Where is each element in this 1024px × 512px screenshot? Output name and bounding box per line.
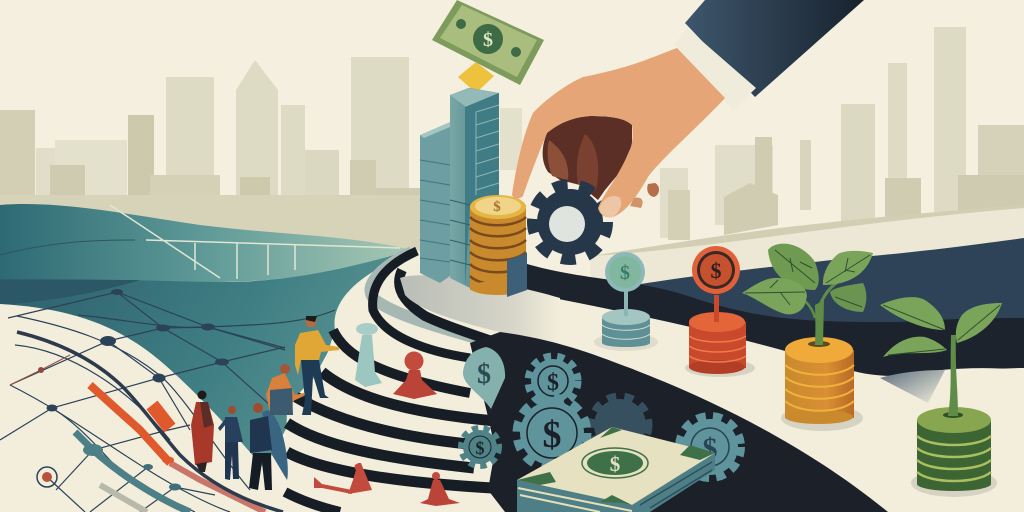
staircase: [285, 250, 512, 512]
money stack: [517, 427, 715, 512]
pin red: $: [710, 258, 722, 283]
gear top: $: [547, 370, 559, 396]
person orange: [266, 364, 304, 415]
gear top: [529, 357, 577, 405]
gear right: $: [702, 432, 718, 465]
money top bill: $: [483, 29, 493, 51]
dark lower area: [470, 332, 888, 512]
person red dress: [191, 390, 214, 472]
palm shadow and fingers: [543, 116, 659, 200]
map pin teal: [463, 347, 505, 409]
coin stack: [470, 195, 526, 295]
teal hills: [0, 204, 412, 512]
person dark suit and blue cloak: [249, 403, 288, 490]
pin red: [685, 246, 755, 377]
pawn teal: [355, 323, 382, 387]
dark gear: [534, 186, 606, 258]
cuff: [674, 28, 756, 110]
map pin teal: $: [477, 359, 491, 390]
beige horizon: [0, 195, 425, 265]
blue block: [507, 253, 527, 297]
gear middle: $: [542, 414, 562, 456]
sleeve: [685, 0, 864, 97]
coin stack: $: [493, 199, 501, 215]
tower right: [450, 88, 499, 288]
pin teal: [594, 252, 658, 351]
navy hill: [600, 238, 1024, 345]
skyline right: [590, 27, 1024, 270]
plant on orange stack: [742, 244, 873, 431]
speckled platform: [400, 275, 560, 344]
gear small: [462, 429, 498, 465]
yellow diamond: [458, 62, 494, 93]
money stack: $: [610, 452, 620, 476]
pin teal: $: [620, 262, 630, 284]
speckled ground: [880, 370, 945, 403]
red arrow marker: [314, 463, 372, 494]
tower left: [420, 122, 450, 283]
map colored routes: [17, 332, 283, 512]
money top bill: [432, 0, 544, 85]
map nodes: [37, 289, 229, 490]
dark band: [527, 264, 1024, 380]
skyline left: [0, 57, 522, 258]
pawn red: [393, 352, 437, 399]
cream hill right: [590, 208, 1024, 300]
gear small: $: [476, 438, 484, 458]
hand: [512, 48, 725, 217]
gear back dark: [592, 397, 648, 453]
person small blue: [218, 406, 243, 480]
red cone: [420, 472, 460, 506]
plant on green stack: [880, 297, 1002, 497]
person yellow: [295, 316, 339, 415]
map network lines: [0, 292, 335, 512]
gear middle: [518, 399, 586, 467]
cream road: [500, 288, 1024, 512]
cream map area: [0, 304, 300, 512]
gear right: [680, 417, 740, 477]
